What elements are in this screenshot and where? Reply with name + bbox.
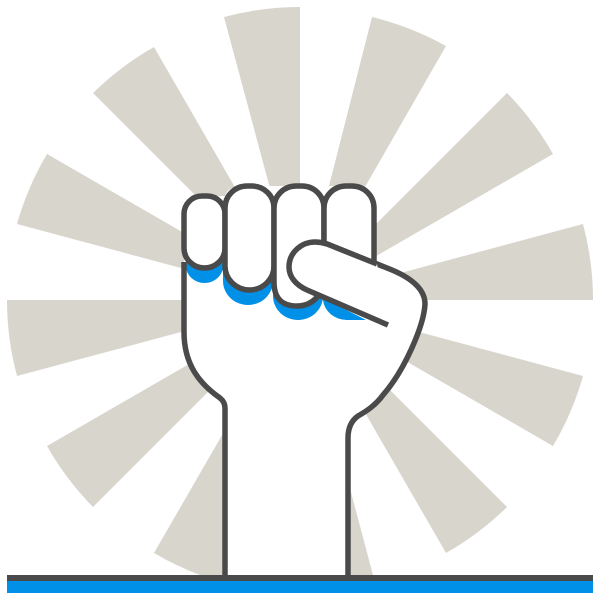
pinky finger [184,196,225,268]
blue finger shadows [186,258,366,320]
ring finger [225,186,274,290]
ground bar: dark [7,575,593,581]
hand outline [184,244,425,575]
thumb [289,242,388,325]
hand silhouette [184,186,425,575]
middle finger [274,186,324,306]
fist [184,186,425,575]
index finger [324,186,374,263]
ground bar: blue [7,581,593,593]
